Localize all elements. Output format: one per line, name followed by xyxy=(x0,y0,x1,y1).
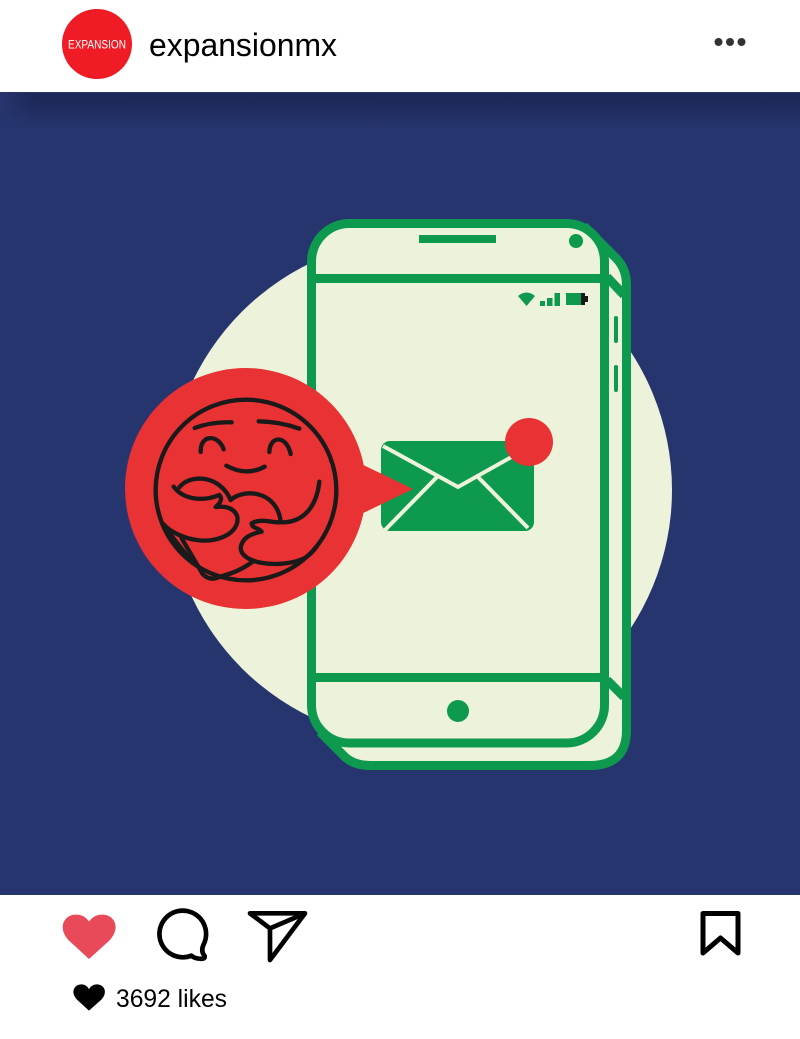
emoji face xyxy=(156,400,336,580)
icon: envelope xyxy=(381,418,553,531)
icon: small black heart xyxy=(73,984,105,1011)
icon: smartphone xyxy=(311,224,626,766)
logo: Expansion xyxy=(62,9,132,79)
illustration panel xyxy=(0,92,800,895)
header bar xyxy=(0,0,800,92)
notification dot xyxy=(505,418,553,466)
home button xyxy=(447,700,469,722)
camera xyxy=(569,234,583,248)
logo: Expansion: EXPANSION xyxy=(68,38,126,52)
speech bubble: care emoji xyxy=(125,368,413,609)
icon: comment xyxy=(159,911,206,959)
status icons xyxy=(518,292,588,306)
account name: expansionmx xyxy=(149,27,337,63)
icon: red heart xyxy=(63,915,116,959)
action bar xyxy=(63,911,305,1011)
icon: send xyxy=(250,913,305,960)
icon: more options xyxy=(714,38,746,46)
background circle xyxy=(168,238,672,742)
likes count: 3692 likes xyxy=(116,985,227,1013)
speaker xyxy=(419,235,496,243)
icon: bookmark xyxy=(703,914,738,953)
